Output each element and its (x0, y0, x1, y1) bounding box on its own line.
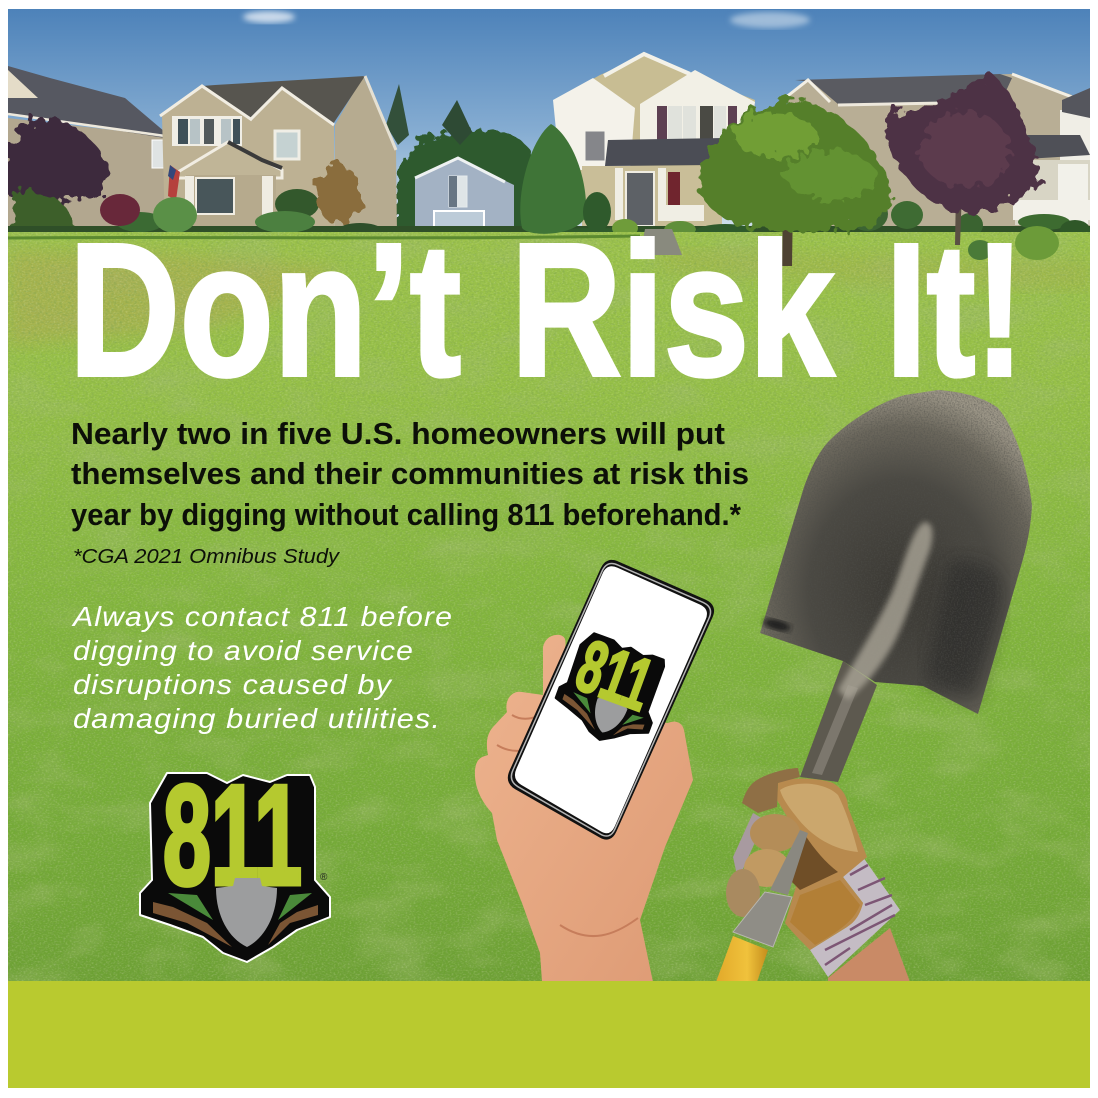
palm and wrist (475, 635, 693, 982)
tree: centre green (698, 98, 893, 266)
shovel handle yellow (716, 936, 768, 982)
shrubs row (8, 165, 1090, 242)
logo numerals: 811 (163, 756, 302, 915)
main statement: Nearly two in five U.S. homeowners will put (71, 416, 725, 451)
logo shovel (216, 878, 277, 947)
advice text (71, 601, 453, 734)
source note: *CGA 2021 Omnibus Study (73, 546, 340, 568)
glove left cuff (733, 813, 760, 872)
title: It! (886, 205, 1024, 416)
shovel neck (800, 661, 877, 782)
phone (509, 561, 713, 838)
main statement (71, 416, 749, 532)
title: Don’t (69, 205, 461, 416)
lawn (8, 226, 1090, 982)
shovel blade (755, 388, 1035, 718)
forearm (828, 928, 910, 982)
shovel (716, 388, 1035, 982)
glove back (777, 778, 867, 950)
cypress tree (520, 124, 611, 234)
ferrule (733, 892, 792, 947)
house: tall white gabled (553, 54, 755, 232)
house: far left (8, 66, 165, 232)
main statement: themselves and their communities at risk this (71, 456, 749, 491)
tree: purple left (8, 119, 109, 235)
title (69, 205, 1024, 416)
logo grass (168, 893, 312, 920)
glove fingers (750, 814, 800, 852)
phone 811 logo (554, 632, 666, 741)
bottom band (8, 981, 1090, 1088)
house: small blue (415, 158, 514, 232)
advice text: disruptions caused by (73, 669, 393, 700)
main statement: year by digging without calling 811 beforehand.* (71, 497, 742, 532)
house: large right (785, 74, 1090, 240)
glove thumb (742, 768, 800, 813)
shaft through grip (770, 830, 808, 895)
title: Risk (511, 205, 835, 416)
glove cuff (810, 857, 900, 977)
tree: purple right (885, 72, 1040, 245)
logo outline (140, 773, 330, 962)
advice text: digging to avoid service (73, 635, 414, 666)
811 logo (140, 756, 330, 962)
phone 811 logo: 811 (567, 624, 663, 727)
gloved hand (726, 768, 910, 982)
background trees (386, 84, 535, 232)
advice text: Always contact 811 before (71, 601, 453, 632)
house: two storey left (160, 76, 397, 234)
advice text: damaging buried utilities. (73, 703, 441, 734)
hand holding phone (475, 561, 713, 982)
logo soil (153, 902, 318, 947)
sky (8, 9, 1090, 234)
registered mark: ® (320, 872, 328, 883)
